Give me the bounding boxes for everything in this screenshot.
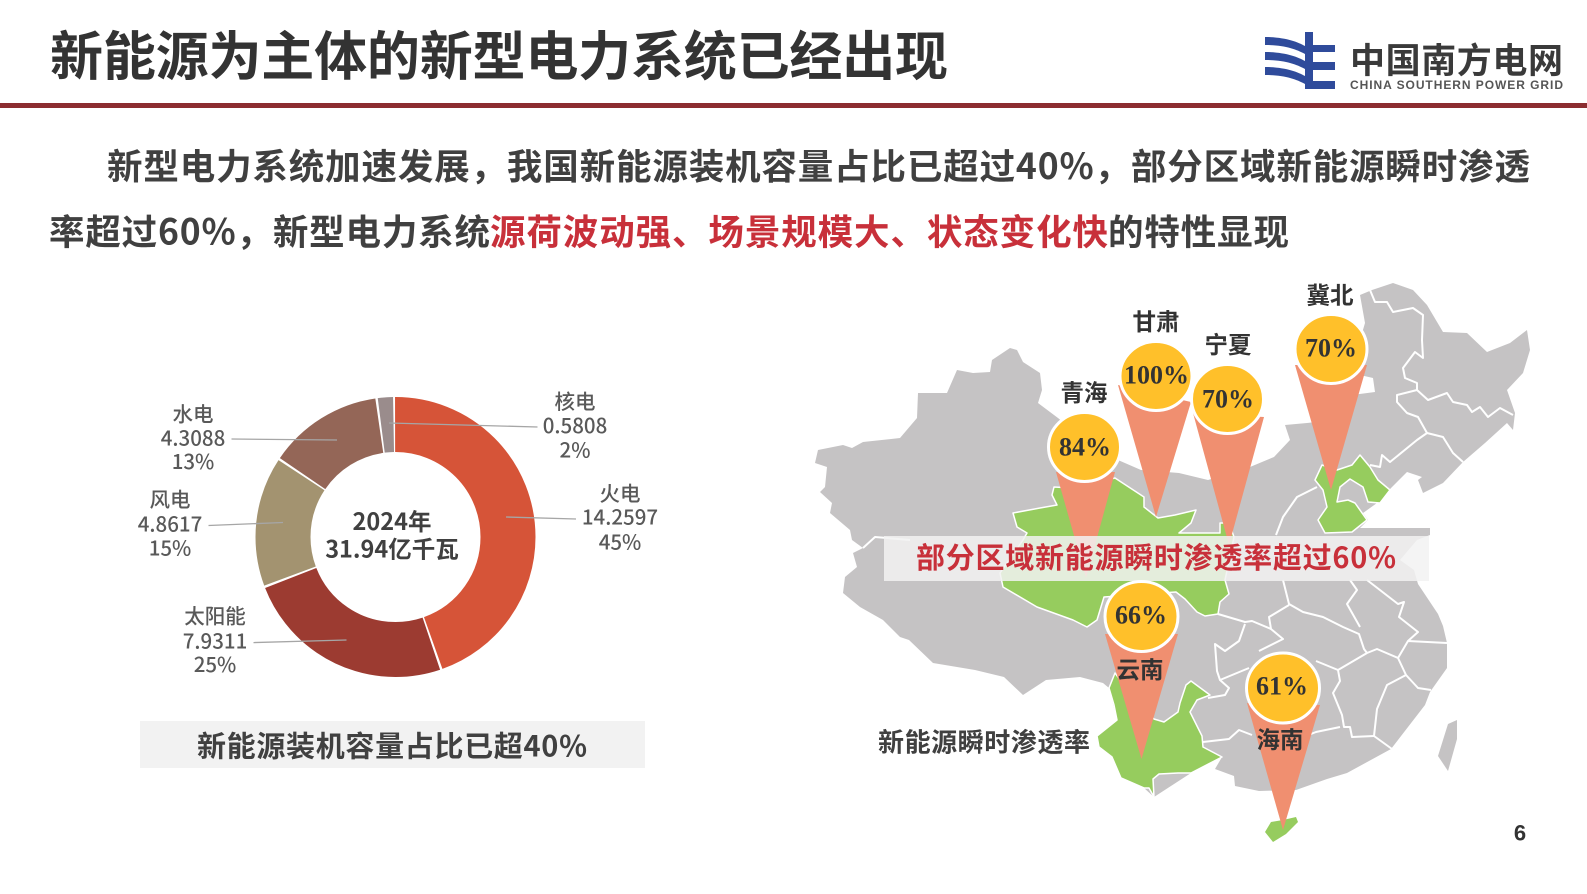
donut chart: installed capacity: 13% <box>172 445 214 475</box>
pin: Hainan 61%: 海南 <box>1256 721 1304 755</box>
logo: China Southern Power Grid <box>1265 32 1563 92</box>
map: highlighted Yunnan <box>1097 673 1222 797</box>
donut chart: installed capacity: 太阳能 <box>184 600 246 630</box>
map of China <box>815 283 1530 842</box>
map: Taiwan <box>1438 720 1457 771</box>
donut chart: installed capacity <box>138 385 658 678</box>
pin: Qinghai 84%: 84% <box>1059 432 1111 462</box>
donut chart: installed capacity: 31.94亿千瓦 <box>325 530 459 564</box>
intro text block: 率超过60%，新型电力系统 <box>49 204 490 256</box>
donut chart: installed capacity: 水电 <box>172 398 214 428</box>
donut chart: installed capacity: 火电 <box>600 477 640 507</box>
donut chart: installed capacity: 0.5808 <box>543 409 607 439</box>
map: highlighted Hebei <box>1315 455 1390 533</box>
pin: Hainan 61% <box>1246 653 1320 830</box>
donut chart: installed capacity: 7.9311 <box>183 624 247 654</box>
pin: Qinghai 84% <box>1048 374 1120 482</box>
donut chart: installed capacity: 14.2597 <box>582 500 658 530</box>
logo: China Southern Power Grid: 中国南方电网 <box>1350 33 1563 84</box>
donut chart: installed capacity: 4.3088 <box>161 422 225 452</box>
donut chart: installed capacity: 4.8617 <box>138 508 202 538</box>
pin: Yunnan 66%: 66% <box>1115 600 1167 630</box>
callout: new energy share: 新能源装机容量占比已超40% <box>197 724 587 766</box>
pin: Hainan 61%: 61% <box>1256 672 1308 700</box>
donut chart: installed capacity: 45% <box>599 526 641 556</box>
pin: Gansu 100% <box>1118 303 1192 517</box>
pin: Ningxia 70%: 70% <box>1202 384 1254 414</box>
intro text block <box>49 139 1530 256</box>
donut chart: installed capacity: 25% <box>194 648 236 678</box>
intro text block: 新型电力系统加速发展，我国新能源装机容量占比已超过40%，部分区域新能源瞬时渗透 <box>107 139 1530 190</box>
donut chart: installed capacity: 核电 <box>554 385 596 415</box>
pin: Ningxia 70%: 宁夏 <box>1204 326 1252 360</box>
callout: regional penetration over 60%: 部分区域新能源瞬时渗透率超过60% <box>916 535 1396 577</box>
pin: North Hebei 70%: 冀北 <box>1306 276 1354 310</box>
intro text block: 源荷波动强、场景规模大、状态变化快 <box>490 204 1108 256</box>
pin: North Hebei 70% <box>1295 276 1367 490</box>
donut chart: installed capacity: 风电 <box>150 483 190 513</box>
pin: Qinghai 84%: 青海 <box>1060 374 1108 408</box>
pin: Gansu 100%: 100% <box>1124 360 1189 390</box>
pin: North Hebei 70%: 70% <box>1305 334 1357 362</box>
pin: Gansu 100%: 甘肃 <box>1132 303 1180 337</box>
donut chart: installed capacity: 2% <box>560 434 590 464</box>
pin: Yunnan 66% <box>1105 582 1178 759</box>
intro text block: 的特性显现 <box>1108 204 1289 256</box>
map legend label: 新能源瞬时渗透率 <box>878 722 1090 760</box>
pin cone behind banner: Qinghai <box>1056 472 1115 578</box>
donut chart: installed capacity: 2024年 <box>353 503 431 537</box>
pin: Ningxia 70% <box>1192 326 1264 434</box>
map: highlighted Qinghai Gansu Ningxia Sichuan regions <box>1000 478 1234 627</box>
pin cone behind banner: Ningxia <box>1193 413 1264 545</box>
page number: 6 <box>1514 820 1526 846</box>
donut chart: installed capacity: 15% <box>149 532 191 562</box>
logo: China Southern Power Grid: CHINA SOUTHERN POWER GRID <box>1350 78 1563 92</box>
callout: new energy share <box>140 721 645 768</box>
pin: Yunnan 66%: 云南 <box>1116 651 1164 685</box>
title: 新能源为主体的新型电力系统已经出现 <box>50 15 948 91</box>
map: highlighted Hainan <box>1265 817 1298 842</box>
callout: regional penetration over 60% <box>884 413 1429 581</box>
